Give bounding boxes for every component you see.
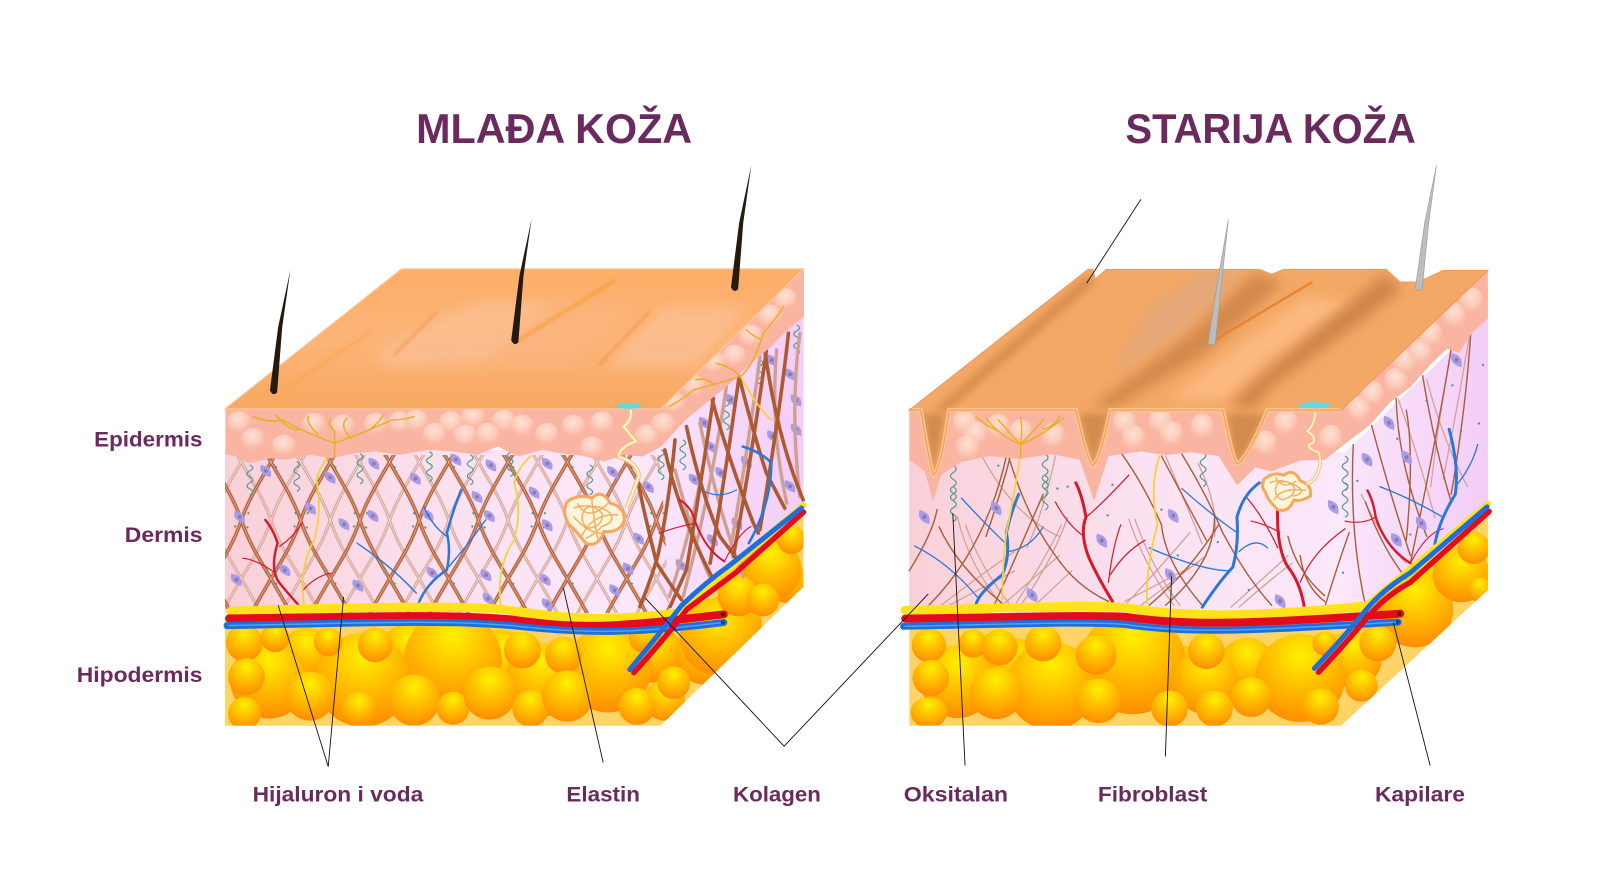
oxytalan fibres bbox=[950, 452, 1348, 521]
label: Kapilare: Kapilare bbox=[1375, 783, 1465, 806]
hypodermis background bbox=[225, 509, 804, 726]
dermis side bbox=[1341, 314, 1488, 609]
surface outline bbox=[909, 410, 1341, 475]
sweat gland bbox=[565, 442, 639, 544]
wrinkle shading bbox=[923, 270, 1401, 475]
skin surface bbox=[225, 269, 804, 409]
label: Epidermis: Epidermis bbox=[94, 429, 202, 452]
epidermis cells bbox=[953, 287, 1484, 462]
dermis front bbox=[225, 450, 665, 613]
blood vessels front and diagonal bbox=[227, 505, 804, 673]
title: young skin: MLAĐA KOŽA bbox=[416, 104, 692, 152]
label: Hijaluron i voda: Hijaluron i voda bbox=[253, 783, 424, 806]
blood vessels front and diagonal bbox=[904, 504, 1489, 672]
wrinkled skin surface bbox=[909, 269, 1488, 475]
brown collagen bbox=[909, 318, 1472, 607]
yellow nerve fibres bbox=[302, 377, 771, 606]
title: older skin: STARIJA KOŽA bbox=[1126, 104, 1416, 152]
fibroblasts bbox=[231, 354, 802, 610]
label: Dermis: Dermis bbox=[125, 524, 202, 547]
nerve in epidermis bbox=[976, 417, 1064, 458]
surface creases bbox=[282, 280, 649, 390]
surface highlights bbox=[368, 302, 746, 368]
fat cells bbox=[226, 525, 808, 730]
red capillaries bbox=[1055, 475, 1443, 607]
label: Oksitalan: Oksitalan bbox=[904, 783, 1008, 806]
surface edge line bbox=[909, 269, 1488, 475]
dermis side bbox=[644, 312, 804, 611]
dermis front bbox=[909, 452, 1348, 613]
label: Hipodermis: Hipodermis bbox=[77, 664, 202, 687]
yellow nerve fibres bbox=[1002, 452, 1159, 603]
fat cells bbox=[911, 532, 1492, 730]
blue capillaries bbox=[357, 447, 771, 604]
sensory receptor glow bbox=[616, 403, 641, 409]
surface crease bbox=[1215, 282, 1312, 340]
panel: older skin cube bbox=[904, 165, 1492, 730]
side collagen dark bbox=[638, 333, 803, 606]
green dots bbox=[997, 364, 1484, 591]
panel: young skin cube bbox=[225, 165, 808, 730]
label: Kolagen: Kolagen bbox=[733, 783, 821, 806]
epidermis cells and nerve bbox=[227, 288, 798, 460]
label: Fibroblast: Fibroblast bbox=[1098, 783, 1207, 806]
side collagen pale bbox=[669, 333, 800, 596]
blue capillaries bbox=[915, 429, 1478, 607]
epidermis bbox=[225, 268, 804, 463]
sweat gland knot bbox=[1263, 472, 1311, 510]
epidermis bbox=[909, 269, 1488, 501]
fragmented pale collagen bbox=[941, 322, 1472, 607]
sweat duct bbox=[1306, 410, 1320, 484]
leader lines bbox=[278, 199, 1430, 767]
hairs bbox=[270, 165, 751, 394]
grey hairs bbox=[1208, 165, 1436, 345]
hypodermis background bbox=[909, 504, 1488, 726]
detail group: dermis bbox=[231, 325, 803, 610]
label: Elastin: Elastin bbox=[566, 783, 640, 806]
fibroblasts bbox=[919, 353, 1462, 608]
red capillaries bbox=[243, 500, 751, 606]
collagen lattice bbox=[225, 455, 675, 613]
sensory receptor glow bbox=[1298, 402, 1331, 408]
oxytalan fibres bbox=[247, 325, 799, 495]
